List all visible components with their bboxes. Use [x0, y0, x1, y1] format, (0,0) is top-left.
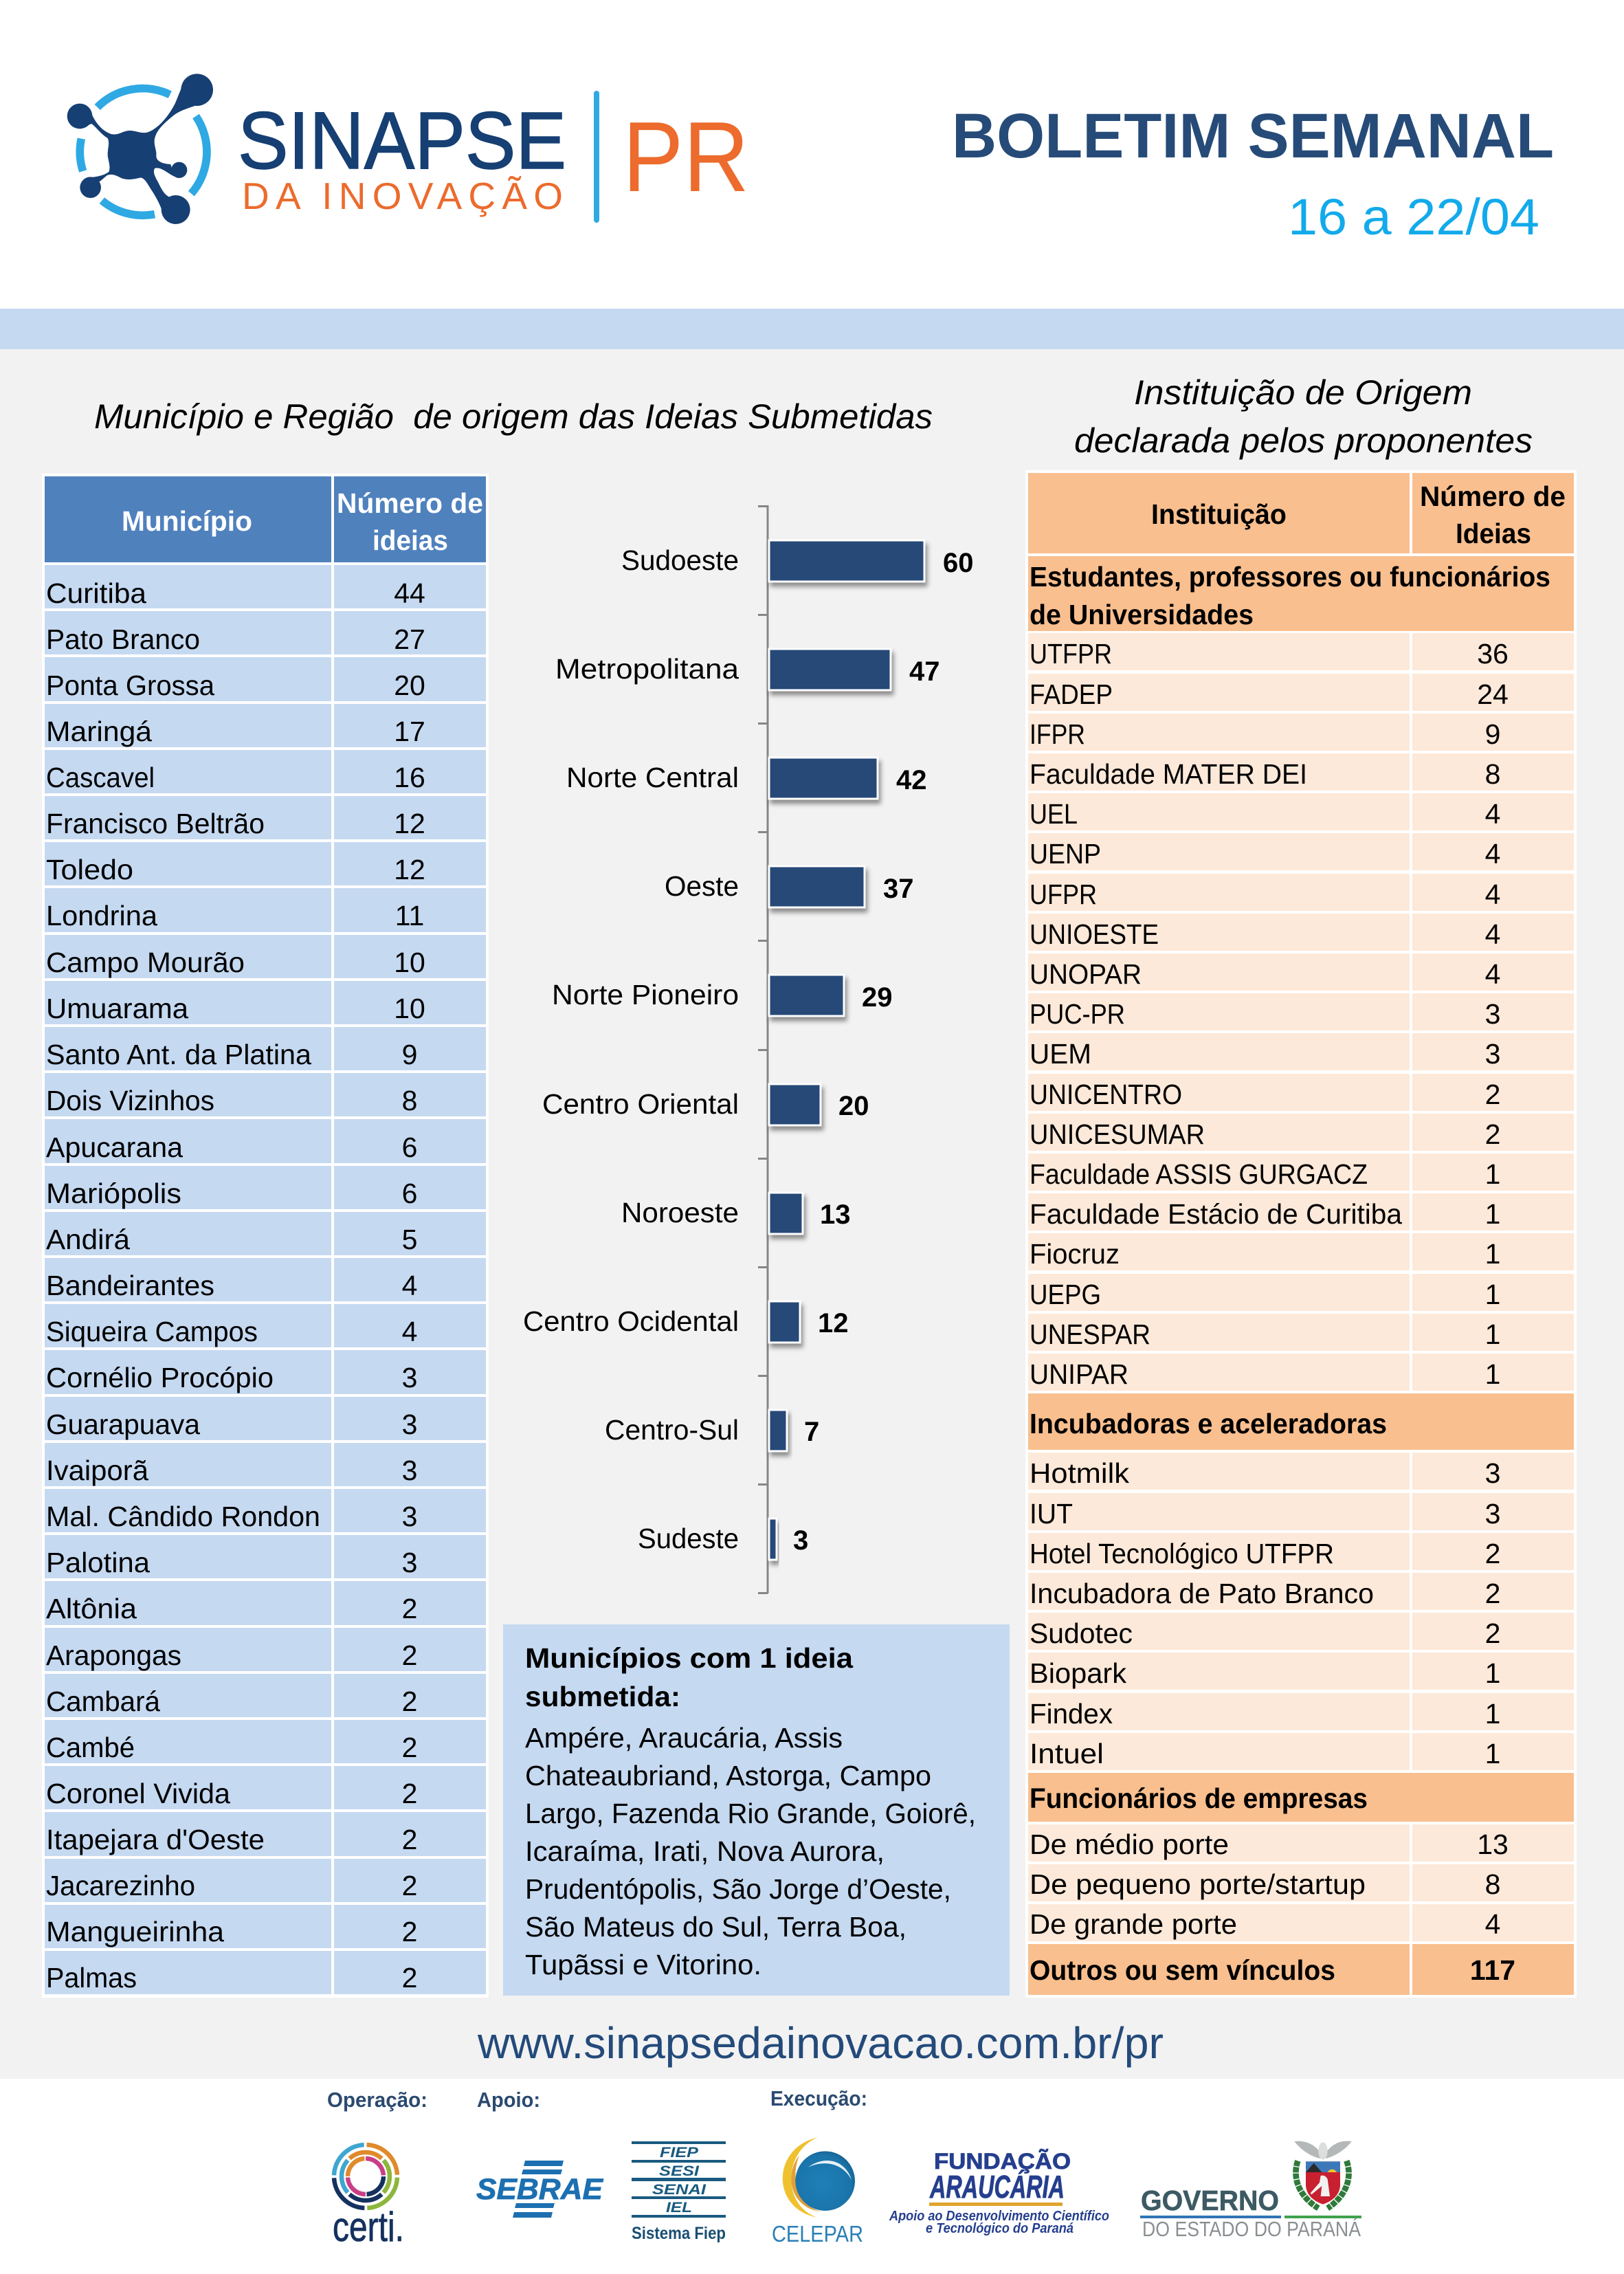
row PUC-PR: [1028, 993, 1574, 1030]
section: incubadoras: Incubadoras e aceleradoras: [1030, 1408, 1387, 1439]
row Faculdade MATER DEI: Faculdade MATER DEI: [1030, 758, 1307, 790]
row Palmas: Palmas: [46, 1962, 137, 1994]
row Hotel Tecnológico UTFPR: 2: [1485, 1538, 1500, 1569]
bar Centro Ocidental 12: Centro Ocidental: [523, 1305, 739, 1337]
row UEM: 3: [1485, 1038, 1500, 1070]
row UTFPR: [1028, 633, 1574, 670]
bar Oeste 37: Oeste: [665, 870, 739, 902]
row Maringá: Maringá: [46, 716, 152, 747]
row Arapongas: [45, 1628, 486, 1671]
row Itapejara d'Oeste: 2: [402, 1824, 417, 1855]
bar Norte Pioneiro 29: [552, 975, 892, 1016]
bar Oeste 37: 37: [883, 874, 914, 904]
row Curitiba: [45, 565, 486, 609]
row Jacarezinho: Jacarezinho: [46, 1870, 195, 1901]
row Findex: [1028, 1693, 1574, 1730]
row Curitiba: Curitiba: [46, 577, 146, 609]
row Cambará: [45, 1674, 486, 1717]
logo: Sistema Fiep: FIEP: [660, 2145, 699, 2161]
row UNICENTRO: UNICENTRO: [1030, 1079, 1182, 1110]
row UEL: UEL: [1030, 798, 1078, 830]
title: Boletim Semanal: BOLETIM SEMANAL: [952, 101, 1554, 171]
bar Norte Central 42: 42: [896, 765, 926, 795]
row Faculdade ASSIS GURGACZ: [1028, 1153, 1574, 1191]
row Siqueira Campos: 4: [402, 1316, 417, 1347]
row Dois Vizinhos: [45, 1073, 486, 1116]
table header: Ideias: [1456, 518, 1531, 549]
row Mangueirinha: [45, 1905, 486, 1948]
callout heading: submetida:: [525, 1681, 680, 1712]
table header: Instituição: [1151, 498, 1287, 530]
callout body: São Mateus do Sul, Terra Boa,: [525, 1911, 906, 1943]
row Ivaiporã: Ivaiporã: [46, 1455, 148, 1486]
callout heading: Municípios com 1 ideia: [525, 1642, 854, 1674]
bar Centro Oriental 20: 20: [838, 1091, 869, 1121]
row Dois Vizinhos: 8: [402, 1085, 417, 1116]
row Cascavel: 16: [394, 762, 425, 793]
wordmark SINAPSE: SINAPSE: [238, 96, 566, 186]
row Faculdade Estácio de Curitiba: [1028, 1193, 1574, 1230]
row Apucarana: [45, 1119, 486, 1163]
row UEPG: 1: [1485, 1279, 1500, 1310]
row Biopark: Biopark: [1030, 1657, 1127, 1689]
table header: Município: [122, 505, 252, 537]
header band: [0, 309, 1624, 349]
bar Noroeste 13: 13: [820, 1200, 851, 1230]
row UNIOESTE: [1028, 914, 1574, 951]
row Cambará: 2: [402, 1686, 417, 1717]
row Cornélio Procópio: [45, 1350, 486, 1394]
row UEM: UEM: [1030, 1038, 1091, 1070]
row Andirá: Andirá: [46, 1224, 130, 1255]
callout body: Icaraíma, Irati, Nova Aurora,: [525, 1835, 885, 1867]
logo: CERTI: certi.: [333, 2204, 404, 2250]
row Curitiba: 44: [394, 577, 425, 609]
row Cambará: Cambará: [46, 1686, 160, 1717]
logo: SEBRAE: [476, 2161, 603, 2218]
row Intuel: 1: [1485, 1738, 1500, 1769]
row Siqueira Campos: [45, 1304, 486, 1347]
row FADEP: 24: [1477, 678, 1509, 710]
row Ponta Grossa: Ponta Grossa: [46, 670, 214, 701]
logo: Sistema Fiep: IEL: [666, 2200, 692, 2216]
row Altônia: [45, 1581, 486, 1625]
bar Sudoeste 60: 60: [943, 548, 973, 578]
section: universidades: [1028, 556, 1574, 631]
row Mariópolis: Mariópolis: [46, 1178, 181, 1209]
row Coronel Vivida: [45, 1766, 486, 1809]
bar Noroeste 13: [621, 1193, 851, 1234]
logo: Fundação Araucária: e Tecnológico do Paraná: [926, 2221, 1074, 2236]
row Itapejara d'Oeste: [45, 1812, 486, 1856]
bar Centro-Sul 7: 7: [804, 1417, 819, 1447]
row Ivaiporã: 3: [402, 1455, 417, 1486]
row Maringá: 17: [394, 716, 425, 747]
logo: Sinapse da Inovação PR: [67, 74, 749, 224]
row Hotel Tecnológico UTFPR: Hotel Tecnológico UTFPR: [1030, 1538, 1334, 1569]
row UNESPAR: UNESPAR: [1030, 1318, 1150, 1350]
row Toledo: 12: [394, 854, 425, 885]
callout body: Prudentópolis, São Jorge d’Oeste,: [525, 1873, 951, 1905]
label Execução: Execução:: [770, 2086, 867, 2110]
callout body: Ampére, Araucária, Assis: [525, 1722, 843, 1754]
row UNIPAR: [1028, 1354, 1574, 1391]
bar Centro-Sul 7: Centro-Sul: [605, 1414, 739, 1446]
row Arapongas: 2: [402, 1640, 417, 1671]
row IUT: 3: [1485, 1498, 1500, 1530]
row UNESPAR: [1028, 1314, 1574, 1351]
bar Metropolitana 47: Metropolitana: [555, 653, 739, 685]
row Toledo: Toledo: [46, 854, 133, 885]
row Campo Mourão: 10: [394, 947, 425, 978]
logo: Sistema Fiep: SESI: [659, 2163, 700, 2179]
row UTFPR: UTFPR: [1030, 638, 1112, 670]
row UNICESUMAR: UNICESUMAR: [1030, 1118, 1205, 1150]
row Hotmilk: [1028, 1453, 1574, 1490]
row Biopark: [1028, 1653, 1574, 1690]
row Palmas: 2: [402, 1962, 417, 1994]
row UENP: 4: [1485, 838, 1500, 870]
row UNICENTRO: 2: [1485, 1079, 1500, 1110]
bar Norte Central 42: [566, 758, 926, 799]
logo: Sistema Fiep: SENAI: [652, 2182, 707, 2198]
callout body: Chateaubriand, Astorga, Campo: [525, 1760, 931, 1791]
row Cornélio Procópio: Cornélio Procópio: [46, 1362, 274, 1393]
icon: Paraná coat of arms: [1294, 2141, 1352, 2208]
label Operação: Operação:: [327, 2088, 427, 2112]
row Mal. Cândido Rondon: 3: [402, 1501, 417, 1532]
table header: ideias: [372, 525, 448, 556]
row Cascavel: Cascavel: [46, 762, 155, 793]
row Umuarama: Umuarama: [46, 993, 188, 1024]
row UENP: [1028, 833, 1574, 870]
row Faculdade Estácio de Curitiba: Faculdade Estácio de Curitiba: [1030, 1198, 1402, 1230]
bar chart: ideas per region: [523, 505, 973, 1594]
bar Centro-Sul 7: [605, 1410, 819, 1451]
row Pato Branco: Pato Branco: [46, 623, 200, 655]
row Hotel Tecnológico UTFPR: [1028, 1533, 1574, 1570]
row Cambé: [45, 1720, 486, 1763]
wordmark PR: PR: [623, 101, 749, 212]
logo: Governo do Estado do Paraná: DO ESTADO DO PARANÁ: [1142, 2217, 1361, 2241]
row Mangueirinha: 2: [402, 1916, 417, 1947]
row Incubadora de Pato Branco: Incubadora de Pato Branco: [1030, 1578, 1374, 1609]
logo: Fundação Araucária: Apoio ao Desenvolvimento Científico: [889, 2209, 1109, 2224]
row UENP: UENP: [1030, 838, 1101, 870]
chart axis: [758, 505, 768, 1594]
bar Centro Ocidental 12: 12: [818, 1308, 848, 1338]
row De médio porte: De médio porte: [1030, 1829, 1229, 1860]
row De médio porte: [1028, 1824, 1574, 1862]
row Palmas: [45, 1951, 486, 1994]
row Faculdade MATER DEI: 8: [1485, 758, 1500, 790]
row PUC-PR: 3: [1485, 998, 1500, 1030]
row Altônia: Altônia: [46, 1593, 137, 1624]
bar Centro Ocidental 12: [523, 1301, 848, 1343]
bar Oeste 37: [665, 866, 914, 907]
row Mal. Cândido Rondon: Mal. Cândido Rondon: [46, 1501, 320, 1532]
row Santo Ant. da Platina: [45, 1027, 486, 1070]
row Andirá: 5: [402, 1224, 417, 1255]
row Santo Ant. da Platina: Santo Ant. da Platina: [46, 1039, 311, 1070]
heading: instituição de origem: Instituição de Origem: [1134, 373, 1472, 412]
row UNIPAR: 1: [1485, 1358, 1500, 1390]
bar Metropolitana 47: 47: [909, 656, 940, 687]
row Coronel Vivida: 2: [402, 1778, 417, 1809]
logo: Fundação Araucária: ARAUCÁRIA: [929, 2169, 1065, 2205]
row Londrina: [45, 888, 486, 932]
row Biopark: 1: [1485, 1657, 1500, 1689]
row Campo Mourão: [45, 935, 486, 978]
bar Norte Pioneiro 29: Norte Pioneiro: [552, 979, 739, 1011]
row IUT: IUT: [1030, 1498, 1073, 1530]
row Ponta Grossa: 20: [394, 670, 425, 701]
row Jacarezinho: 2: [402, 1870, 417, 1901]
row Mangueirinha: Mangueirinha: [46, 1916, 224, 1947]
row De pequeno porte/startup: [1028, 1864, 1574, 1901]
row Pato Branco: 27: [394, 623, 425, 655]
row UEL: 4: [1485, 798, 1500, 830]
row Guarapuava: Guarapuava: [46, 1409, 200, 1440]
row Findex: Findex: [1030, 1698, 1113, 1730]
row Umuarama: 10: [394, 993, 425, 1024]
logo: CELEPAR: CELEPAR: [772, 2221, 863, 2247]
row Cambé: 2: [402, 1732, 417, 1763]
row Palotina: [45, 1535, 486, 1578]
row Campo Mourão: Campo Mourão: [46, 947, 245, 978]
row Mariópolis: 6: [402, 1178, 417, 1209]
row UEPG: UEPG: [1030, 1279, 1101, 1310]
row IUT: [1028, 1493, 1574, 1530]
row Faculdade Estácio de Curitiba: 1: [1485, 1198, 1500, 1230]
logo: Fundação Araucária: FUNDAÇÃO: [934, 2149, 1071, 2174]
row Faculdade ASSIS GURGACZ: Faculdade ASSIS GURGACZ: [1030, 1158, 1368, 1190]
row Ivaiporã: [45, 1443, 486, 1486]
bar Sudoeste 60: [621, 540, 973, 582]
row Francisco Beltrão: Francisco Beltrão: [46, 808, 265, 839]
callout body: Largo, Fazenda Rio Grande, Goiorê,: [525, 1798, 976, 1829]
row UNESPAR: 1: [1485, 1318, 1500, 1350]
row Mariópolis: [45, 1166, 486, 1209]
row IFPR: 9: [1485, 718, 1500, 750]
row Cascavel: [45, 750, 486, 793]
row UNICESUMAR: 2: [1485, 1118, 1500, 1150]
row Ponta Grossa: [45, 657, 486, 701]
row Sudotec: [1028, 1613, 1574, 1650]
section: universidades: Estudantes, professores ou funcionários: [1030, 561, 1550, 593]
bar Sudeste 3: Sudeste: [638, 1523, 739, 1554]
callout: municípios com 1 ideia: [503, 1624, 1010, 1996]
row De grande porte: 4: [1485, 1908, 1500, 1940]
panel: institution table: [1025, 470, 1577, 1998]
heading: município e região: Município e Região de origem das Ideias Submetidas: [94, 397, 933, 436]
row Francisco Beltrão: 12: [394, 808, 425, 839]
row Bandeirantes: Bandeirantes: [46, 1270, 214, 1301]
row Jacarezinho: [45, 1859, 486, 1902]
callout body: [525, 1722, 976, 1980]
row UNIOESTE: UNIOESTE: [1030, 918, 1159, 950]
logo: Governo do Estado do Paraná: [1140, 2141, 1361, 2241]
row IFPR: [1028, 714, 1574, 751]
row UNOPAR: UNOPAR: [1030, 958, 1142, 990]
row UNICENTRO: [1028, 1074, 1574, 1111]
row Francisco Beltrão: [45, 796, 486, 839]
row FADEP: FADEP: [1030, 678, 1113, 710]
row De grande porte: [1028, 1904, 1574, 1941]
section: funcionários de empresas: [1028, 1773, 1574, 1822]
row Palotina: Palotina: [46, 1547, 150, 1578]
row De pequeno porte/startup: De pequeno porte/startup: [1030, 1868, 1366, 1900]
row UNOPAR: 4: [1485, 958, 1500, 990]
bar Centro Oriental 20: [542, 1084, 869, 1125]
logo: SEBRAE: SEBRAE: [476, 2173, 603, 2206]
website url: www.sinapsedainovacao.com.br/pr: [477, 2018, 1164, 2068]
row IFPR: IFPR: [1030, 718, 1085, 750]
row Coronel Vivida: Coronel Vivida: [46, 1778, 230, 1809]
row Intuel: [1028, 1733, 1574, 1770]
row UNIOESTE: 4: [1485, 918, 1500, 950]
row Maringá: [45, 704, 486, 747]
row Hotmilk: Hotmilk: [1030, 1457, 1130, 1489]
row FADEP: [1028, 674, 1574, 711]
date range: 16 a 22/04: [1288, 188, 1539, 245]
row UEPG: [1028, 1274, 1574, 1311]
row Palotina: 3: [402, 1547, 417, 1578]
row Bandeirantes: 4: [402, 1270, 417, 1301]
bar Norte Pioneiro 29: 29: [862, 982, 892, 1013]
section: incubadoras: [1028, 1393, 1574, 1450]
callout heading: [525, 1642, 854, 1712]
row De médio porte: 13: [1477, 1829, 1509, 1860]
row UEM: [1028, 1033, 1574, 1070]
row UFPR: [1028, 874, 1574, 911]
row UFPR: 4: [1485, 879, 1500, 910]
heading: instituição de origem: [1074, 373, 1533, 460]
bar Metropolitana 47: [555, 649, 940, 690]
row Apucarana: Apucarana: [46, 1132, 183, 1163]
row Arapongas: Arapongas: [46, 1640, 181, 1671]
logo: CERTI: [332, 2143, 404, 2250]
row Hotmilk: 3: [1485, 1457, 1500, 1489]
icon: Celepar globe: [783, 2137, 855, 2218]
bar Sudoeste 60: Sudoeste: [621, 544, 739, 576]
icon: synapse symbol: [67, 74, 213, 224]
row Faculdade MATER DEI: [1028, 753, 1574, 791]
logo: Fundação Araucária: [889, 2149, 1109, 2236]
row Londrina: Londrina: [46, 900, 157, 931]
row Sudotec: 2: [1485, 1618, 1500, 1649]
row De grande porte: De grande porte: [1030, 1908, 1237, 1940]
row Bandeirantes: [45, 1258, 486, 1301]
row Mal. Cândido Rondon: [45, 1489, 486, 1532]
table header: Número de: [337, 487, 483, 519]
logo divider: [594, 91, 599, 223]
section: universidades: de Universidades: [1030, 599, 1254, 630]
row Faculdade ASSIS GURGACZ: 1: [1485, 1158, 1500, 1190]
logo: Sistema Fiep: [632, 2141, 726, 2243]
row PUC-PR: PUC-PR: [1030, 998, 1125, 1030]
wordmark DA INOVAÇÃO: DA INOVAÇÃO: [242, 175, 563, 217]
row UNIPAR: UNIPAR: [1030, 1358, 1128, 1390]
row Pato Branco: [45, 611, 486, 655]
row Findex: 1: [1485, 1698, 1500, 1730]
row Fiocruz: 1: [1485, 1238, 1500, 1270]
row Incubadora de Pato Branco: 2: [1485, 1578, 1500, 1609]
logo: CELEPAR: [772, 2137, 863, 2247]
row De pequeno porte/startup: 8: [1485, 1868, 1500, 1900]
row Dois Vizinhos: Dois Vizinhos: [46, 1085, 214, 1116]
row Sudotec: Sudotec: [1030, 1618, 1133, 1649]
bar Norte Central 42: Norte Central: [566, 762, 739, 793]
table header: [1028, 473, 1574, 553]
bar Sudeste 3: 3: [793, 1525, 808, 1556]
heading: instituição de origem: declarada pelos proponentes: [1074, 421, 1533, 460]
row Intuel: Intuel: [1030, 1738, 1104, 1769]
table header: Número de: [1420, 481, 1566, 512]
row Outros ou sem vínculos: Outros ou sem vínculos: [1030, 1954, 1335, 1986]
row Fiocruz: [1028, 1233, 1574, 1270]
bar Sudeste 3: [638, 1519, 808, 1560]
bar Noroeste 13: Noroeste: [621, 1197, 739, 1228]
logo: Governo do Estado do Paraná: GOVERNO: [1141, 2185, 1279, 2216]
row Apucarana: 6: [402, 1132, 417, 1163]
row Umuarama: [45, 981, 486, 1024]
row Fiocruz: Fiocruz: [1030, 1238, 1120, 1270]
row UFPR: UFPR: [1030, 879, 1097, 910]
row UNOPAR: [1028, 953, 1574, 991]
row Londrina: 11: [395, 900, 424, 931]
callout body: Tupãssi e Vitorino.: [525, 1949, 761, 1980]
row Santo Ant. da Platina: 9: [402, 1039, 417, 1070]
row Cambé: Cambé: [46, 1732, 135, 1763]
row Siqueira Campos: Siqueira Campos: [46, 1316, 258, 1347]
row UTFPR: 36: [1477, 638, 1509, 670]
row Cornélio Procópio: 3: [402, 1362, 417, 1393]
row Altônia: 2: [402, 1593, 417, 1624]
row Toledo: [45, 842, 486, 885]
label Apoio: Apoio:: [477, 2088, 540, 2112]
bar Centro Oriental 20: Centro Oriental: [542, 1088, 739, 1120]
row UNICESUMAR: [1028, 1114, 1574, 1151]
table header: [45, 476, 486, 562]
row Itapejara d'Oeste: Itapejara d'Oeste: [46, 1824, 265, 1855]
row Andirá: [45, 1212, 486, 1255]
row Guarapuava: 3: [402, 1409, 417, 1440]
row Outros ou sem vínculos: [1028, 1944, 1574, 1995]
row Incubadora de Pato Branco: [1028, 1573, 1574, 1610]
section: funcionários de empresas: Funcionários de empresas: [1030, 1782, 1368, 1814]
row Guarapuava: [45, 1397, 486, 1440]
panel: municipality table: [42, 474, 489, 1998]
logo: Sistema Fiep: Sistema Fiep: [632, 2224, 726, 2243]
row Outros ou sem vínculos: 117: [1470, 1954, 1515, 1986]
row UEL: [1028, 793, 1574, 830]
